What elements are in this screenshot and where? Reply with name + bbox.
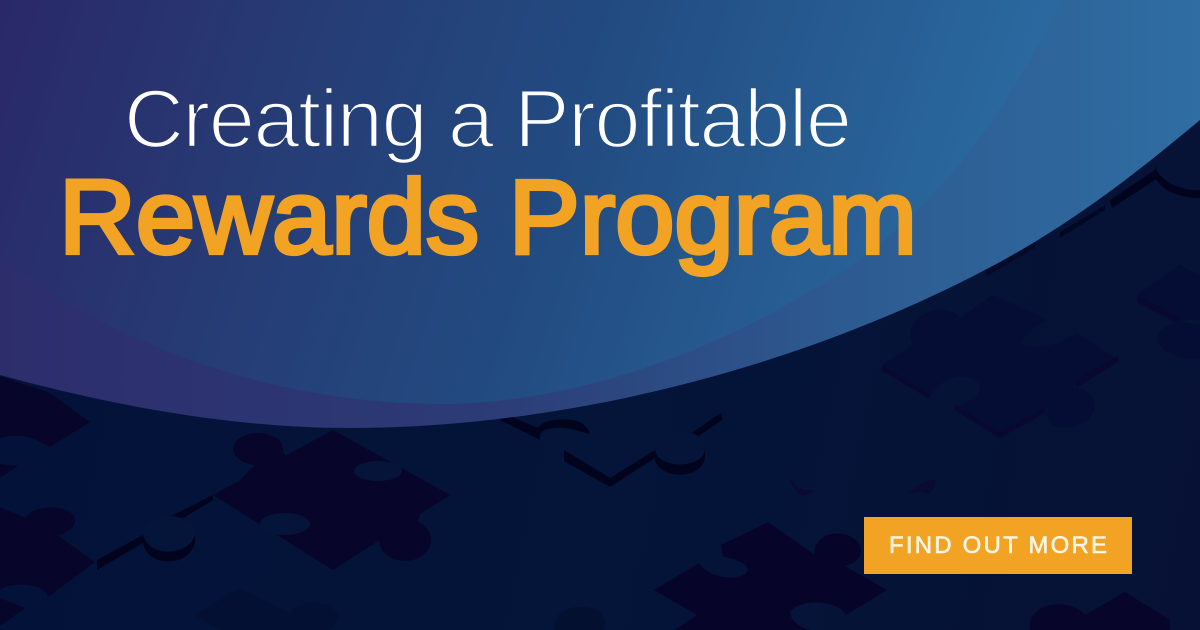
puzzle piece: centre black outline: [500, 412, 722, 487]
puzzle piece: far left upper: [0, 376, 90, 447]
inner lighter blue shape: [0, 0, 1060, 404]
puzzle piece: right edge shadow: [1137, 295, 1180, 322]
heading line 2: Rewards Program: [59, 159, 917, 276]
puzzle pieces: [0, 165, 1200, 630]
call to action button: [864, 517, 1132, 574]
puzzle piece: upper right large: [882, 295, 1118, 438]
puzzle piece edge shadow: [882, 356, 1118, 438]
puzzle piece: right edge: [1137, 265, 1200, 358]
heading line 1: Creating a Profitable: [124, 72, 852, 165]
puzzle piece: bottom centre left tab: [554, 607, 605, 630]
puzzle piece: black gap with tab: [97, 495, 213, 570]
puzzle tab top centre: [655, 431, 705, 463]
puzzle crescents mid: [790, 478, 935, 497]
puzzle piece: bottom left faint: [195, 588, 338, 630]
puzzle piece: left lower: [0, 507, 95, 597]
puzzle piece: bottom centre: [654, 522, 887, 630]
puzzle piece: centre left dark: [213, 430, 450, 570]
call to action button: FIND OUT MORE: [889, 532, 1107, 559]
puzzle piece: far left edge sliver: [0, 464, 18, 478]
puzzle piece: bottom right: [1030, 592, 1170, 630]
puzzle piece: far left bottom: [0, 598, 25, 626]
outer curved band: [0, 0, 1200, 428]
puzzle edges near top right: [985, 165, 1200, 276]
puzzle tab top: [143, 516, 195, 550]
